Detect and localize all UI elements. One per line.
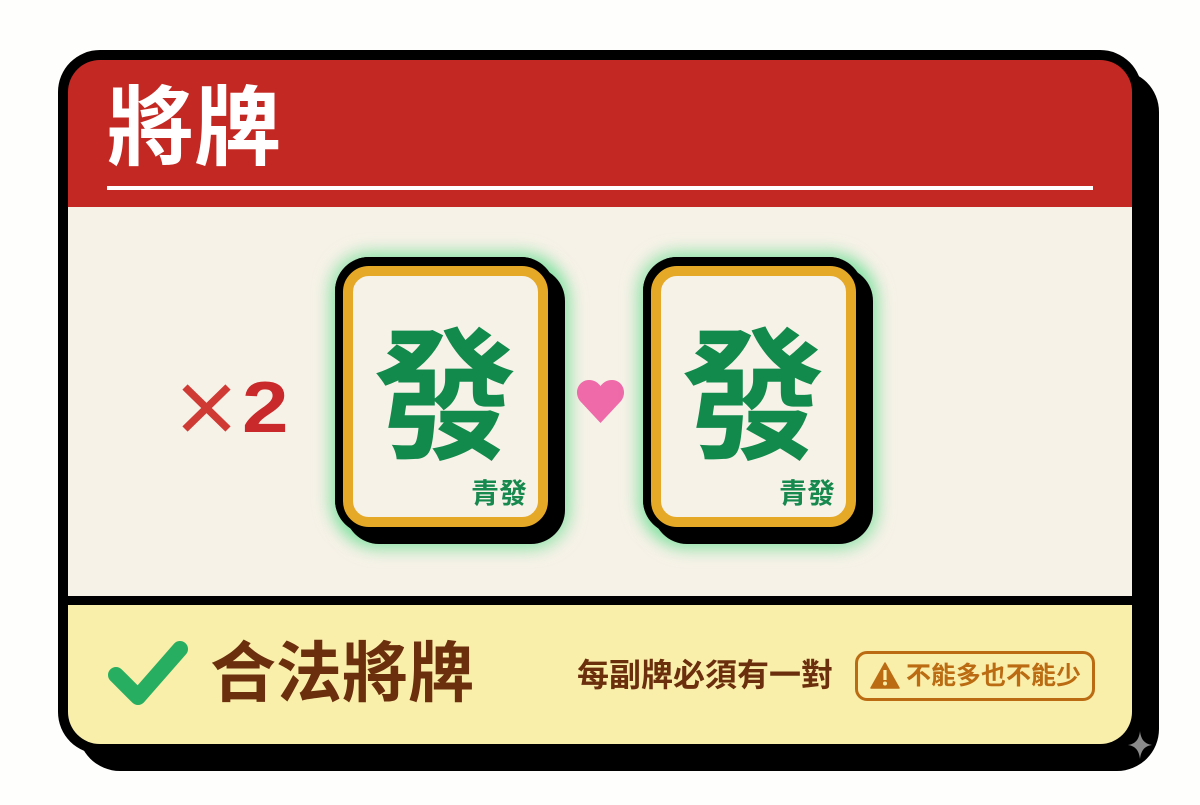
tile character: 發 [681, 318, 825, 479]
panel: footer [68, 605, 1132, 744]
number: 2 [242, 368, 288, 448]
footer heading: 合法將牌 [210, 636, 474, 710]
separator line [68, 596, 1132, 605]
tile: right [626, 240, 890, 560]
multiplier label [182, 368, 288, 448]
panel: tiles area [68, 207, 1132, 596]
icon: sparkle [1128, 731, 1152, 759]
icon: check mark [108, 641, 188, 705]
tile caption: 青發 [779, 478, 835, 509]
card border [58, 50, 1142, 754]
title: 將牌 [107, 80, 281, 177]
icon: heart [577, 380, 624, 423]
tile: left [318, 240, 582, 560]
tile character: 發 [373, 318, 517, 479]
card shadow [78, 70, 1159, 771]
callout: warning badge [855, 651, 1095, 701]
icon: multiply sign [182, 384, 231, 432]
badge text: 不能多也不能少 [906, 662, 1081, 690]
panel: header [68, 60, 1132, 207]
footer note: 每副牌必須有一對 [577, 657, 833, 693]
header rule [107, 186, 1093, 190]
icon: warning triangle [870, 662, 900, 689]
tile caption: 青發 [471, 478, 527, 509]
